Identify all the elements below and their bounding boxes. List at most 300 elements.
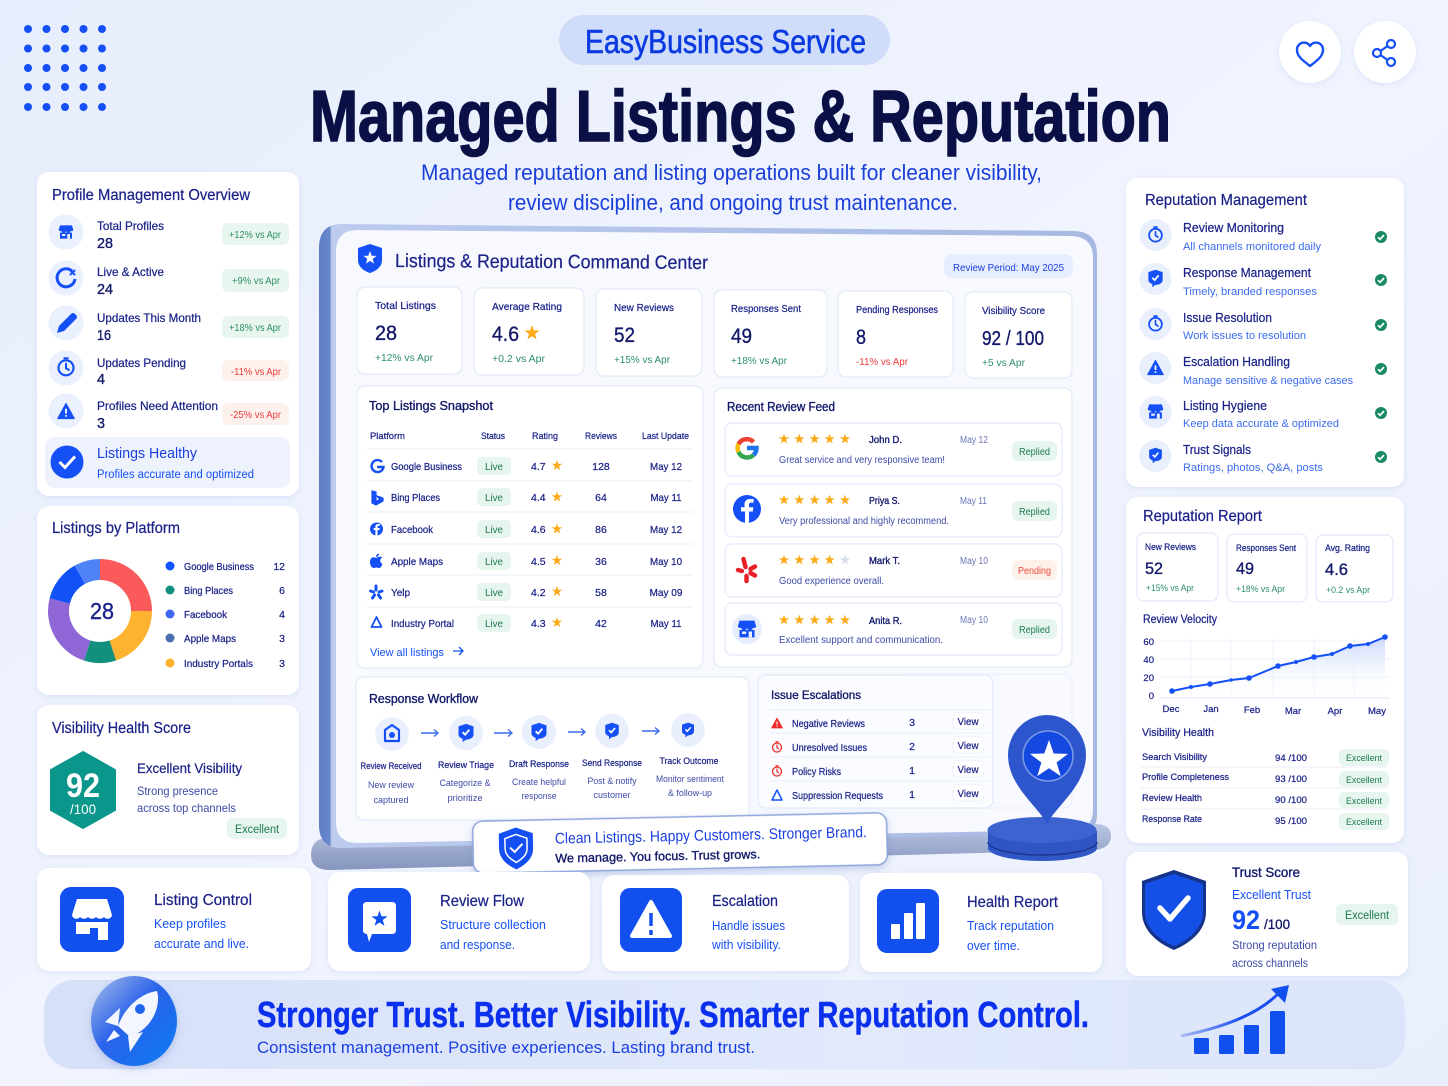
row: bing places: May 11 — [650, 492, 682, 504]
callout: clean listings banner — [473, 813, 887, 873]
row: response rate: 95 /100 — [1275, 816, 1307, 827]
card: trust score: Excellent Trust — [1232, 887, 1311, 902]
kpi: responses sent: Responses Sent — [731, 303, 801, 315]
panel: top listings snapshot — [357, 386, 703, 668]
line chart: review velocity: 20 — [1143, 673, 1154, 684]
row: profile completeness: Excellent — [1346, 775, 1382, 786]
row: profiles need attention: 3 — [97, 416, 105, 432]
row: profiles need attention: Profiles Need Attention — [97, 399, 218, 413]
card: trust score: 92 — [1232, 905, 1260, 935]
review: anita r: May 10 — [960, 615, 988, 626]
row: response rate: Response Rate — [1142, 814, 1202, 825]
kpi: responses sent: +18% vs Apr — [1236, 584, 1285, 595]
review: priya s: Priya S. — [869, 495, 900, 507]
table header: Last Update — [642, 431, 689, 442]
kpi: responses sent: Responses Sent — [1236, 543, 1296, 553]
row: updates pending: -11% vs Apr — [231, 366, 281, 378]
legend: Industry Portals — [184, 658, 253, 670]
row: search visibility: Excellent — [1346, 753, 1382, 764]
row: facebook — [370, 520, 682, 538]
row: profile completeness: Profile Completeness — [1142, 772, 1229, 783]
legend: 6 — [279, 585, 285, 597]
row: issue resolution: Work issues to resolution — [1183, 330, 1306, 342]
row: unresolved issues: 2 — [909, 741, 915, 753]
step: review triage: Review Triage — [438, 760, 494, 771]
step: review received: captured — [374, 795, 408, 805]
icon: share button — [1354, 21, 1416, 83]
review: priya s: May 11 — [960, 496, 987, 507]
kpi: average rating: +0.2 vs Apr — [1326, 585, 1370, 596]
row: policy risks: Policy Risks — [792, 766, 841, 778]
row: listing hygiene: Keep data accurate & optimized — [1183, 418, 1339, 430]
heading: Reputation Management — [1145, 192, 1308, 209]
badge: excellent — [227, 818, 287, 839]
review: john d: John D. — [869, 434, 902, 446]
kpi: pending responses: Pending Responses — [856, 304, 938, 316]
heading: Listings by Platform — [52, 520, 180, 537]
row: policy risks: 1 — [909, 765, 915, 777]
subtitle: Managed reputation and listing operations built for cleaner visibility, — [421, 160, 1042, 185]
legend: 3 — [279, 658, 285, 670]
score hexagon — [51, 752, 115, 828]
row: response rate: Excellent — [1346, 817, 1382, 828]
badge: excellent: Excellent — [1345, 910, 1390, 922]
kpi: new reviews: 52 — [614, 324, 635, 347]
row: escalation handling: Escalation Handling — [1183, 355, 1290, 369]
row: search visibility: Search Visibility — [1142, 752, 1207, 763]
heading: review velocity: Review Velocity — [1143, 614, 1217, 626]
closing headline: Stronger Trust. Better Visibility. Smarter Reputation Control. — [257, 994, 1089, 1035]
kpi: responses sent — [714, 290, 827, 377]
row: escalation handling — [1140, 352, 1387, 387]
row: review health — [1142, 792, 1389, 808]
legend: Facebook — [184, 609, 228, 621]
line chart: review velocity: 0 — [1149, 691, 1154, 702]
brand pill — [559, 15, 890, 65]
heading: Visibility Health Score — [52, 720, 191, 737]
panel: recent review feed — [714, 388, 1072, 667]
row: issue resolution: Issue Resolution — [1183, 311, 1272, 325]
kpi: average rating: 4.6 — [1325, 560, 1348, 579]
row: unresolved issues: View — [958, 741, 979, 752]
kpi: visibility score: Visibility Score — [982, 305, 1045, 317]
row: suppression requests: Suppression Requests — [792, 790, 883, 802]
kpi: total listings: 28 — [375, 322, 397, 345]
icon: store — [732, 614, 762, 644]
line chart: review velocity: 40 — [1143, 655, 1154, 666]
review: john d: Great service and very responsive team! — [779, 455, 945, 466]
table header: Reviews — [585, 431, 617, 442]
heading: visibility health: Visibility Health — [1142, 727, 1214, 739]
card: health report: Track reputation — [967, 919, 1054, 933]
line chart: review velocity: Jan — [1203, 704, 1219, 715]
row: apple maps: 4.5 — [531, 556, 546, 568]
arrow — [568, 728, 585, 736]
row: listing hygiene — [1140, 396, 1387, 430]
row: google business: 128 — [592, 461, 610, 473]
subtitle: review discipline, and ongoing trust maintenance. — [508, 190, 958, 215]
heading: Reputation Report — [1143, 508, 1263, 525]
row: issue resolution — [1140, 308, 1387, 342]
heading: Issue Escalations — [771, 688, 861, 702]
card: health report: Health Report — [967, 894, 1059, 911]
row: suppression requests: View — [958, 789, 979, 800]
card: listing control: accurate and live. — [154, 937, 249, 951]
icon: location pin on pedestal — [988, 715, 1097, 861]
step: review triage: prioritize — [448, 793, 482, 803]
score hexagon: 92 — [66, 767, 100, 805]
card: listing control: Keep profiles — [154, 917, 226, 931]
row: updates pending: Updates Pending — [97, 356, 186, 370]
step: review triage: Categorize & — [440, 778, 490, 788]
row: yelp: Yelp — [391, 587, 410, 599]
row: updates this month — [48, 306, 289, 344]
donut chart: 28 — [90, 598, 114, 624]
kpi: new reviews: +15% vs Apr — [1146, 583, 1194, 594]
panel: reputation report — [1126, 497, 1404, 843]
row: escalation handling: Manage sensitive & negative cases — [1183, 375, 1353, 387]
row: review health: 90 /100 — [1275, 795, 1307, 806]
row: profiles need attention — [48, 394, 289, 432]
row: google business: Google Business — [391, 461, 462, 473]
row: updates this month: 16 — [97, 328, 111, 344]
arrow — [494, 730, 512, 736]
legend: 4 — [279, 609, 285, 621]
row: unresolved issues: Unresolved Issues — [792, 742, 867, 754]
card: review flow: Review Flow — [440, 893, 524, 910]
closing subline: Consistent management. Positive experiences. Lasting brand trust. — [257, 1038, 755, 1057]
card: listing control: Listing Control — [154, 892, 252, 909]
row: updates this month: Updates This Month — [97, 311, 201, 325]
row: updates pending: 4 — [97, 372, 105, 388]
row: bing places: 4.4 — [531, 492, 546, 504]
kpi: total listings: Total Listings — [375, 300, 436, 312]
step: track outcome — [656, 713, 724, 798]
title: Managed Listings & Reputation — [310, 77, 1171, 157]
row: suppression requests — [772, 785, 984, 802]
step: draft response: Create helpful — [512, 777, 566, 787]
line chart: review velocity: Feb — [1244, 705, 1260, 716]
review: anita r: Replied — [1019, 624, 1050, 636]
subtitle — [421, 160, 1042, 215]
step: draft response: Draft Response — [509, 759, 569, 770]
review: john d: May 12 — [960, 435, 988, 446]
heading: Response Workflow — [369, 692, 479, 706]
row: profile completeness: 93 /100 — [1275, 774, 1307, 785]
kpi: new reviews: +15% vs Apr — [614, 354, 670, 366]
row: updates pending — [48, 350, 289, 388]
step: send response: Post & notify — [588, 776, 637, 786]
review: mark t: Pending — [1018, 565, 1051, 577]
row: listing hygiene: Listing Hygiene — [1183, 399, 1267, 413]
icon: facebook — [733, 495, 761, 523]
row: yelp: Live — [485, 587, 503, 599]
row: industry portal: May 11 — [650, 618, 682, 630]
legend — [166, 561, 285, 670]
row: facebook: 4.6 — [531, 524, 546, 536]
panel: visibility health score — [37, 705, 299, 855]
panel: issue escalations — [758, 675, 993, 808]
row: profiles need attention: -25% vs Apr — [230, 409, 281, 421]
icon: google — [738, 439, 757, 457]
row: industry portal — [372, 614, 682, 632]
card: escalation: Handle issues — [712, 919, 785, 933]
kpi: responses sent: 49 — [731, 325, 752, 348]
row: search visibility — [1142, 749, 1389, 766]
review: mark t: Good experience overall. — [779, 576, 884, 587]
card: escalation: with visibility. — [711, 938, 781, 952]
line chart: review velocity: Apr — [1328, 706, 1342, 717]
review: anita r: Excellent support and communication. — [779, 635, 943, 646]
row: apple maps — [370, 552, 682, 570]
arrow — [642, 728, 659, 734]
card: review flow: Structure collection — [440, 918, 546, 932]
line chart: review velocity — [1143, 634, 1390, 717]
row: yelp: May 09 — [650, 587, 683, 599]
icon: bar chart — [877, 889, 939, 953]
row: updates this month: +18% vs Apr — [229, 322, 281, 334]
row: total profiles: Total Profiles — [97, 219, 164, 233]
row: apple maps: May 10 — [650, 556, 682, 568]
decorative dot grid — [24, 25, 106, 111]
row: response management: Timely, branded responses — [1183, 286, 1318, 298]
row: unresolved issues — [772, 737, 984, 754]
review: mark t: May 10 — [960, 556, 988, 567]
kpi: visibility score: +5 vs Apr — [982, 357, 1025, 369]
legend: 12 — [273, 561, 285, 573]
row: facebook: 86 — [595, 524, 607, 536]
icon: rocket — [91, 976, 177, 1066]
row: live and active: 24 — [97, 282, 113, 298]
kpi: pending responses: 8 — [856, 326, 866, 349]
icon: shield check — [499, 827, 534, 870]
step: send response — [582, 714, 642, 800]
row: trust signals — [1140, 440, 1387, 474]
step: draft response: response — [522, 791, 556, 801]
line chart: review velocity: May — [1368, 706, 1386, 717]
card: review flow — [328, 872, 590, 971]
review: anita r — [725, 603, 1062, 655]
kpi: new reviews: New Reviews — [614, 302, 674, 314]
row: trust signals: Trust Signals — [1183, 443, 1251, 457]
review: priya s: Replied — [1019, 506, 1050, 518]
kpi: pending responses: -11% vs Apr — [856, 356, 908, 368]
score description: Excellent Visibility — [137, 760, 242, 776]
kpi: total listings — [357, 287, 462, 374]
row: bing places: Live — [485, 492, 503, 504]
kpi: new reviews: 52 — [1145, 559, 1163, 578]
row: industry portal: Industry Portal — [391, 618, 454, 630]
row: apple maps: 36 — [595, 556, 607, 568]
row: bing places: Bing Places — [391, 492, 440, 504]
row: yelp: 4.2 — [531, 587, 546, 599]
card: health report — [860, 873, 1102, 972]
score description: Strong presence — [137, 784, 218, 798]
monitor stand base — [311, 824, 1111, 870]
row: negative reviews: Negative Reviews — [792, 718, 865, 730]
panel: command center dashboard — [319, 224, 1097, 848]
card: trust score: Trust Score — [1232, 864, 1300, 880]
step: track outcome: Monitor sentiment — [656, 774, 724, 784]
row: yelp: 58 — [595, 587, 607, 599]
icon: growth chart — [1181, 985, 1289, 1054]
row: response management: Response Management — [1183, 266, 1311, 280]
footer banner — [44, 976, 1405, 1069]
row: policy risks: View — [958, 765, 979, 776]
kpi: pending responses — [838, 291, 953, 377]
row: live and active: +9% vs Apr — [232, 275, 280, 287]
kpi: average rating: 4.6 — [492, 323, 519, 346]
row: profile completeness — [1142, 771, 1389, 787]
kpi: responses sent: 49 — [1236, 559, 1254, 578]
card: trust score: Strong reputation — [1232, 940, 1317, 952]
icon: review bubble — [348, 888, 411, 952]
row: total profiles — [48, 214, 289, 252]
row: bing places — [372, 488, 682, 506]
row: trust signals: Ratings, photos, Q&A, posts — [1183, 462, 1324, 474]
kpi: total listings: +12% vs Apr — [375, 352, 433, 364]
link: view all listings: View all listings — [370, 647, 444, 659]
arrow — [421, 730, 438, 736]
step: draft response — [509, 715, 569, 801]
kpi: new reviews: New Reviews — [1145, 542, 1196, 552]
review: anita r: Anita R. — [869, 615, 902, 627]
review: john d: Replied — [1019, 446, 1050, 458]
dashboard heading: Listings & Reputation Command Center — [395, 251, 709, 274]
kpi: average rating: Avg. Rating — [1325, 543, 1370, 553]
row: suppression requests: 1 — [909, 789, 915, 801]
badge: excellent: Excellent — [235, 824, 280, 836]
card: trust score: across channels — [1232, 958, 1308, 970]
icon: storefront — [60, 887, 124, 952]
badge: excellent — [1336, 904, 1398, 925]
row: policy risks — [772, 761, 984, 778]
step: send response: customer — [594, 790, 630, 800]
kpi: new reviews — [596, 289, 702, 376]
legend: 3 — [279, 633, 285, 645]
row: negative reviews: 3 — [909, 717, 915, 729]
legend: Google Business — [184, 561, 254, 573]
row: industry portal: Live — [485, 618, 503, 630]
row: response rate — [1142, 813, 1389, 830]
review: john d — [725, 423, 1062, 476]
table header: Rating — [532, 431, 558, 442]
heading: Recent Review Feed — [727, 400, 835, 414]
row: apple maps: Apple Maps — [391, 556, 443, 568]
score description — [137, 760, 242, 815]
table header: Status — [481, 431, 505, 442]
card: escalation — [602, 875, 849, 971]
row: industry portal: 42 — [595, 618, 607, 630]
row: total profiles: +12% vs Apr — [229, 229, 281, 241]
panel: listings by platform — [37, 506, 299, 695]
kpi: average rating — [474, 288, 584, 375]
step: track outcome: Track Outcome — [660, 756, 718, 767]
review: mark t: Mark T. — [869, 555, 900, 567]
row: apple maps: Live — [485, 556, 503, 568]
row: negative reviews: View — [958, 717, 979, 728]
heading: Profile Management Overview — [52, 187, 251, 204]
ghost panel behind pin — [900, 674, 1072, 808]
kpi: average rating: Average Rating — [492, 301, 562, 313]
kpi: average rating — [1316, 535, 1393, 602]
row: review health: Excellent — [1346, 796, 1382, 807]
row: response management — [1140, 263, 1387, 298]
line chart: review velocity: 60 — [1143, 637, 1154, 648]
kpi: average rating: +0.2 vs Apr — [492, 353, 545, 365]
row: bing places: 64 — [595, 492, 607, 504]
row: live and active — [48, 260, 289, 298]
row: total profiles: 28 — [97, 236, 113, 252]
card: listing control — [37, 868, 311, 971]
step: review received: Review Received — [360, 761, 422, 772]
card: health report: over time. — [967, 939, 1020, 953]
kpi: responses sent — [1227, 534, 1307, 602]
tagline: Clean Listings. Happy Customers. Stronger Brand. — [555, 824, 867, 848]
row: review monitoring — [1140, 219, 1387, 253]
row: industry portal: 4.3 — [531, 618, 546, 630]
row: live and active: Live & Active — [97, 265, 164, 279]
row: facebook: May 12 — [650, 524, 682, 536]
kpi: visibility score — [965, 292, 1072, 378]
table header — [370, 431, 689, 442]
review: priya s — [725, 484, 1062, 537]
panel: response workflow — [356, 677, 749, 820]
row: google business: Live — [485, 461, 503, 473]
callout: listings healthy: Profiles accurate and optimized — [97, 469, 254, 481]
legend: Apple Maps — [184, 633, 236, 645]
brand pill: EasyBusiness Service — [585, 23, 866, 60]
review: mark t — [725, 544, 1062, 597]
card: trust score: /100 — [1264, 916, 1290, 932]
card: trust score — [1126, 852, 1408, 976]
step: track outcome: & follow-up — [668, 788, 712, 798]
row: negative reviews — [772, 713, 984, 730]
kpi: responses sent: +18% vs Apr — [731, 355, 787, 367]
row: review monitoring: All channels monitored daily — [1183, 241, 1321, 253]
row: review monitoring: Review Monitoring — [1183, 221, 1284, 235]
review period pill: Review Period: May 2025 — [953, 262, 1064, 274]
callout: listings healthy: Listings Healthy — [97, 446, 198, 462]
step: send response: Send Response — [582, 758, 642, 769]
donut chart — [44, 555, 156, 667]
row: search visibility: 94 /100 — [1275, 753, 1307, 764]
heading: Top Listings Snapshot — [369, 399, 494, 413]
row: review health: Review Health — [1142, 793, 1202, 804]
score description: across top channels — [137, 801, 236, 815]
table header: Platform — [370, 431, 405, 442]
icon: favourite heart button — [1279, 21, 1341, 83]
row: facebook: Live — [485, 524, 503, 536]
kpi: visibility score: 92 / 100 — [982, 328, 1044, 350]
sub tagline: We manage. You focus. Trust grows. — [555, 847, 760, 866]
review: priya s: Very professional and highly recommend. — [779, 516, 949, 527]
row: google business — [372, 457, 682, 475]
score hexagon: /100 — [70, 801, 96, 817]
icon: shield star — [358, 244, 382, 273]
step: review received — [360, 717, 422, 805]
review period pill — [944, 254, 1073, 278]
card: escalation: Escalation — [712, 893, 778, 910]
row: google business: 4.7 — [531, 461, 546, 473]
step: review received: New review — [368, 780, 414, 790]
row: facebook: Facebook — [391, 524, 434, 536]
step: review triage — [438, 716, 494, 803]
panel: profile management overview — [37, 172, 299, 496]
legend: Bing Places — [184, 585, 233, 597]
kpi: new reviews — [1137, 533, 1218, 601]
icon: yelp — [738, 559, 755, 581]
